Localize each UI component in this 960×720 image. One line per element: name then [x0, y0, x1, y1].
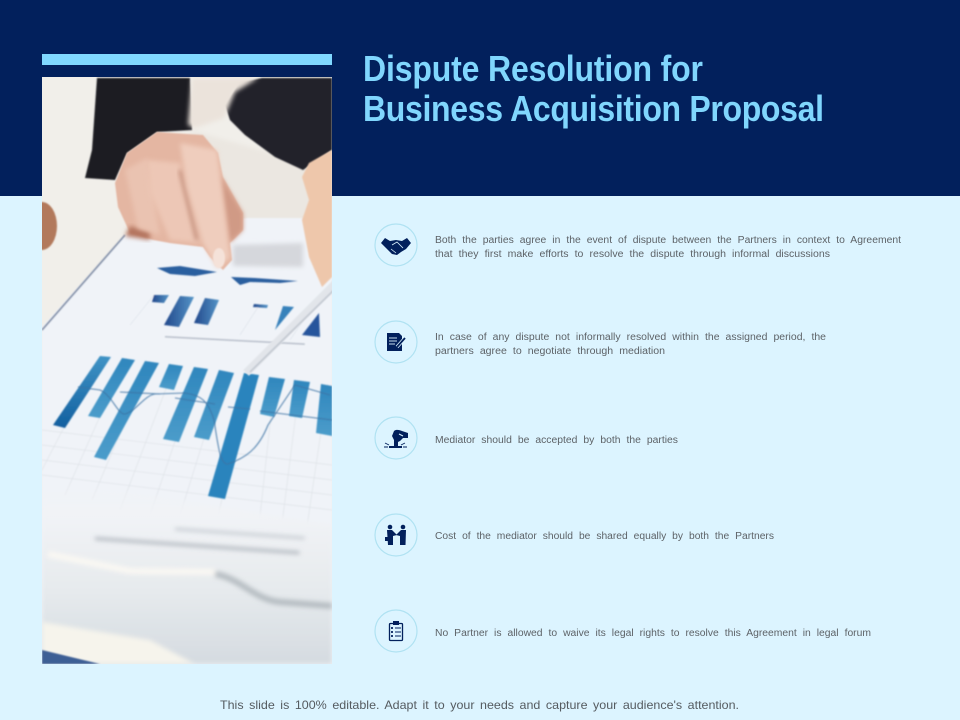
text: item 4: Cost of the mediator should be shared equally by both the Partners [435, 531, 774, 542]
bottom desk edge [42, 622, 195, 664]
header band [0, 0, 960, 196]
photo: hands reviewing printed charts [27, 77, 336, 664]
blurred caption lines [95, 528, 305, 554]
right fingers [302, 150, 332, 287]
item 1: negotiate informally [375, 224, 901, 266]
icon: document with pen [375, 321, 417, 363]
icon: clipboard checklist [375, 610, 417, 652]
text: item 2: In case of any dispute not informally resolved within the assigned period, the [435, 332, 826, 343]
text: item 1: that they first make efforts to resolve the dispute through informal discussions [435, 249, 830, 260]
text: item 1 [435, 235, 901, 260]
paper [42, 218, 332, 524]
footer note: This slide is 100% editable. Adapt it to your needs and capture your audience's attention. [220, 698, 739, 712]
icon: handshake [375, 224, 417, 266]
text: item 5: No Partner is allowed to waive its legal rights to resolve this Agreement in legal forum [435, 628, 871, 639]
large bar chart grid [46, 432, 318, 508]
text: item 3: Mediator should be accepted by both the parties [435, 435, 678, 446]
left thumb [42, 201, 58, 251]
pointing hand [115, 132, 243, 270]
sleeves [85, 78, 332, 180]
large bars [53, 356, 332, 499]
blurred heading marks [157, 266, 298, 285]
icon: two business people [375, 514, 417, 556]
item 4: cost sharing [375, 514, 774, 556]
accent bar [42, 54, 332, 65]
lower page fade [42, 567, 332, 664]
pen [246, 283, 336, 373]
item 3: mediator acceptance [375, 417, 678, 459]
text: item 2 [435, 332, 826, 357]
paperclip band [48, 554, 332, 606]
title [363, 49, 824, 129]
icon: gavel hand [375, 417, 417, 459]
trend lines [78, 385, 332, 464]
item 5: legal rights [375, 610, 871, 652]
text: item 2: partners agree to negotiate through mediation [435, 346, 665, 357]
upper small bar chart [130, 295, 320, 345]
item 2: mediation [375, 321, 826, 363]
text: item 1: Both the parties agree in the event of dispute between the Partners in context to Agreement [435, 235, 901, 246]
title: Dispute Resolution for [363, 49, 703, 89]
title: Business Acquisition Proposal [363, 89, 824, 129]
white cuff [188, 78, 258, 128]
